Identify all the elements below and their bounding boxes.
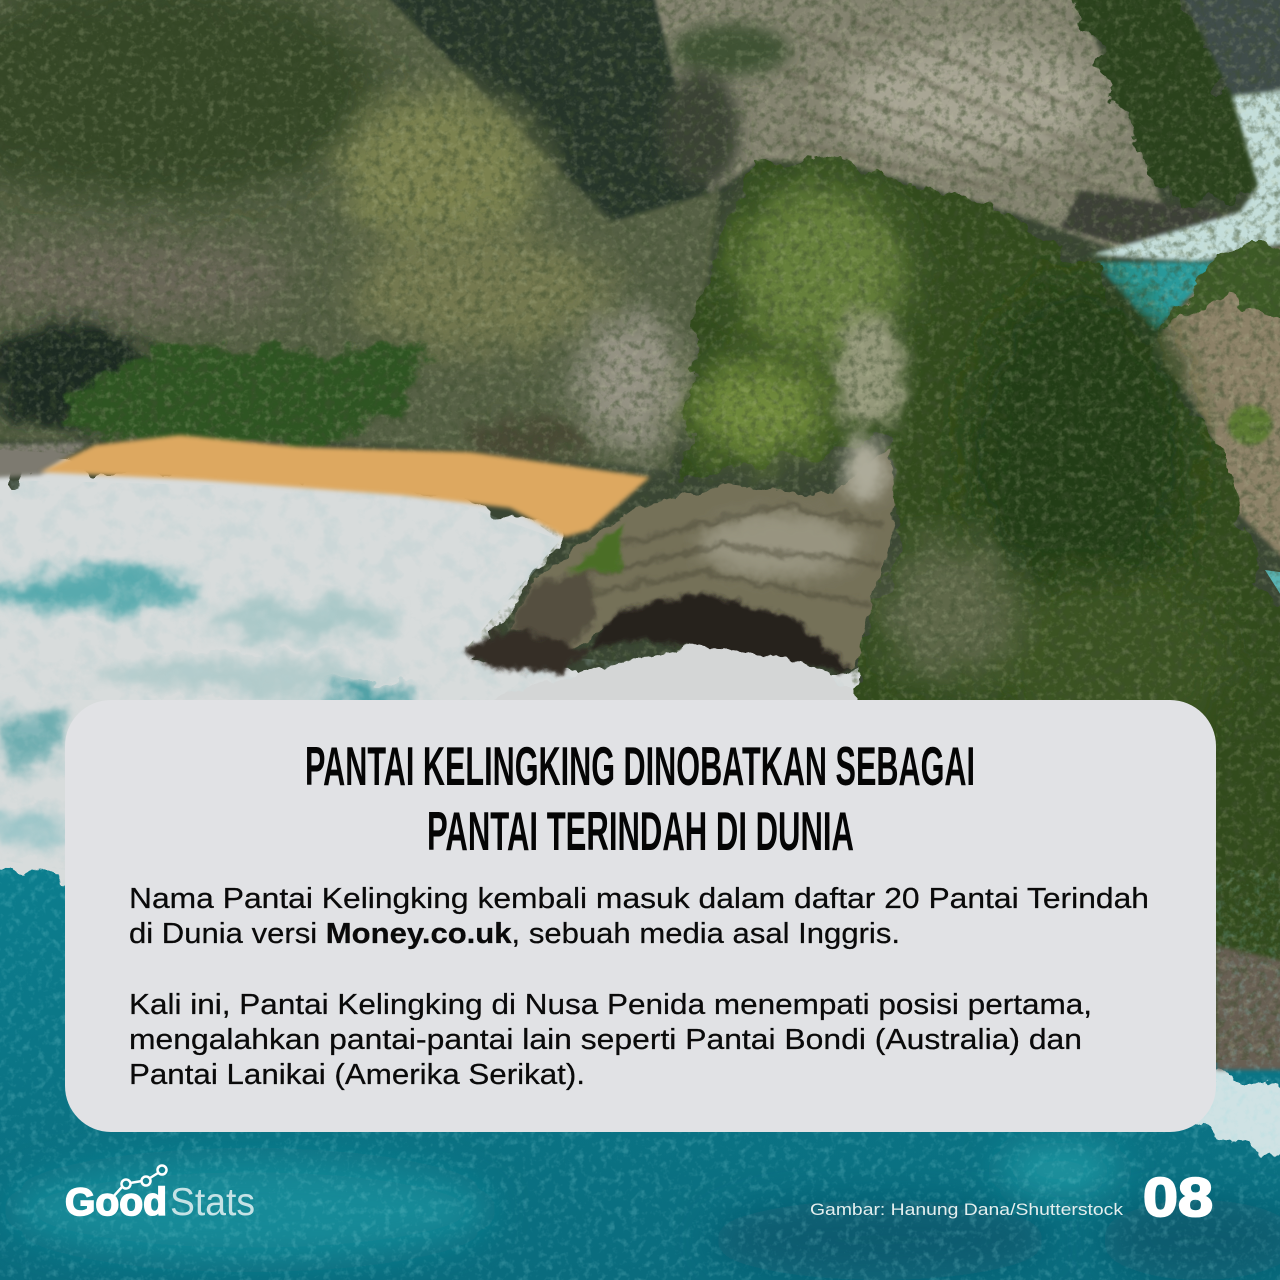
headland cliff bbox=[462, 438, 895, 672]
logo: GoodStats bbox=[65, 1166, 255, 1224]
main headland bbox=[680, 160, 1280, 1070]
sea texture bbox=[0, 870, 1280, 1280]
foam bbox=[0, 470, 870, 875]
image credit: Gambar: Hanung Dana/Shutterstock bbox=[810, 1200, 1124, 1219]
panel: text card bbox=[65, 700, 1216, 1132]
foam texture bbox=[0, 480, 620, 862]
logo wordmark: Stats: Stats bbox=[170, 1181, 255, 1224]
left slope bbox=[0, 0, 720, 470]
back-right green bbox=[1058, 0, 1258, 207]
water top right bbox=[1090, 88, 1280, 332]
text block: second paragraph bbox=[129, 989, 1092, 1091]
distant corner bbox=[1175, 0, 1280, 96]
far beach strip bbox=[0, 442, 90, 478]
back-right cliff bbox=[650, 0, 1240, 255]
text block: second paragraph: mengalahkan pantai-pantai lain seperti Pantai Bondi (Australia) dan bbox=[129, 1024, 1082, 1056]
heading bbox=[305, 735, 975, 862]
back gully bbox=[370, 0, 725, 225]
icon: trend line bbox=[112, 1166, 166, 1198]
heading: PANTAI TERINDAH DI DUNIA bbox=[427, 800, 854, 862]
beach bbox=[40, 435, 650, 537]
text block: second paragraph: Kali ini, Pantai Kelingking di Nusa Penida menempati posisi pertama, bbox=[129, 989, 1092, 1021]
right hill bbox=[1150, 240, 1280, 625]
text block: intro paragraph: Nama Pantai Kelingking kembali masuk dalam daftar 20 Pantai Terindah bbox=[129, 883, 1149, 915]
text block: second paragraph: Pantai Lanikai (Amerika Serikat). bbox=[129, 1059, 585, 1091]
text block: intro paragraph: di Dunia versi Money.co.uk , sebuah media asal Inggris. bbox=[129, 918, 900, 950]
sea bbox=[0, 840, 1280, 1280]
page number: 08 bbox=[1143, 1166, 1213, 1228]
logo wordmark: Good: Good bbox=[65, 1181, 167, 1224]
surf under cliff bbox=[480, 645, 855, 705]
text block: intro paragraph bbox=[129, 883, 1149, 950]
